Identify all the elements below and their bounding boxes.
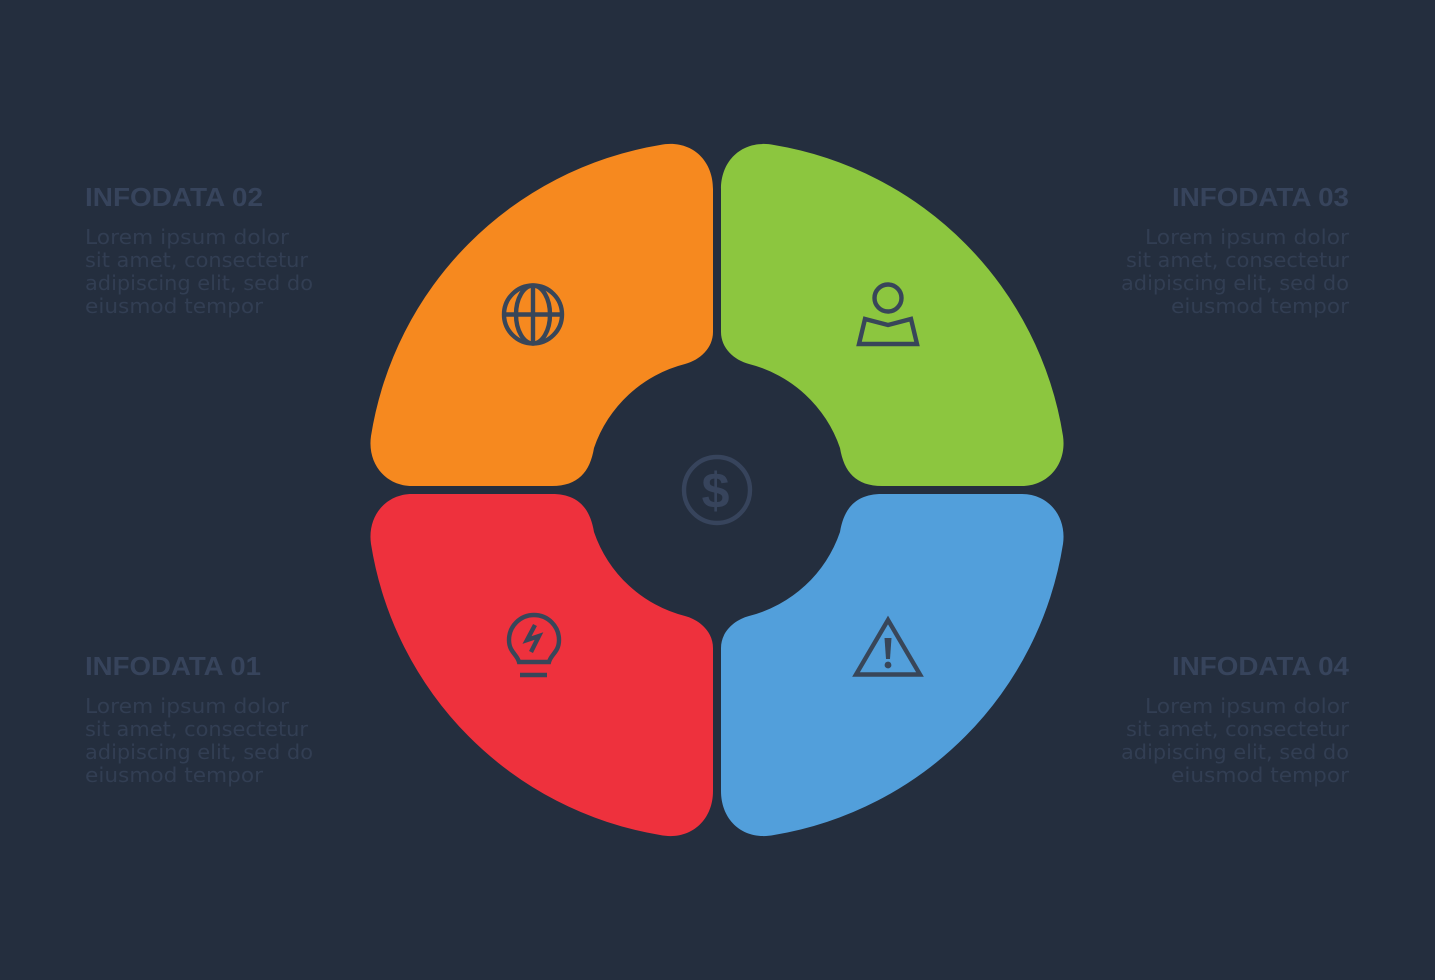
text block: infodata 02: eiusmod tempor [85,294,264,318]
text block: infodata 02 [85,182,313,318]
icon: dollar in circle [684,457,750,523]
text block: infodata 04: Lorem ipsum dolor [1145,694,1350,718]
text block: infodata 02: Lorem ipsum dolor [85,225,290,249]
text block: infodata 04: INFODATA 04 [1172,651,1350,681]
text block: infodata 01: INFODATA 01 [85,651,261,681]
text block: infodata 01: adipiscing elit, sed do [85,740,313,764]
panel: orange segment 02 [370,144,713,486]
icon: globe [504,285,562,344]
text block: infodata 04: eiusmod tempor [1171,763,1350,787]
text block: infodata 01: eiusmod tempor [85,763,264,787]
panel: red segment 01 [370,494,713,836]
icon: dollar in circle: $ [702,463,730,519]
text block: infodata 03 [1121,182,1350,318]
icon: light bulb [509,615,559,675]
text block: infodata 04: adipiscing elit, sed do [1121,740,1349,764]
text block: infodata 03: sit amet, consectetur [1126,248,1350,272]
text block: infodata 01: sit amet, consectetur [85,717,309,741]
text block: infodata 02: adipiscing elit, sed do [85,271,313,295]
text block: infodata 03: INFODATA 03 [1172,182,1349,212]
text block: infodata 02: sit amet, consectetur [85,248,309,272]
text block: infodata 03: adipiscing elit, sed do [1121,271,1349,295]
text block: infodata 01 [85,651,313,787]
text block: infodata 03: Lorem ipsum dolor [1145,225,1350,249]
text block: infodata 01: Lorem ipsum dolor [85,694,290,718]
panel: blue segment 04 [721,494,1064,836]
text block: infodata 04 [1121,651,1350,787]
panel: green segment 03 [721,144,1064,486]
icon: warning triangle [856,620,920,674]
text block: infodata 04: sit amet, consectetur [1126,717,1350,741]
icon: person with map [859,284,917,344]
text block: infodata 02: INFODATA 02 [85,182,263,212]
text block: infodata 03: eiusmod tempor [1171,294,1350,318]
